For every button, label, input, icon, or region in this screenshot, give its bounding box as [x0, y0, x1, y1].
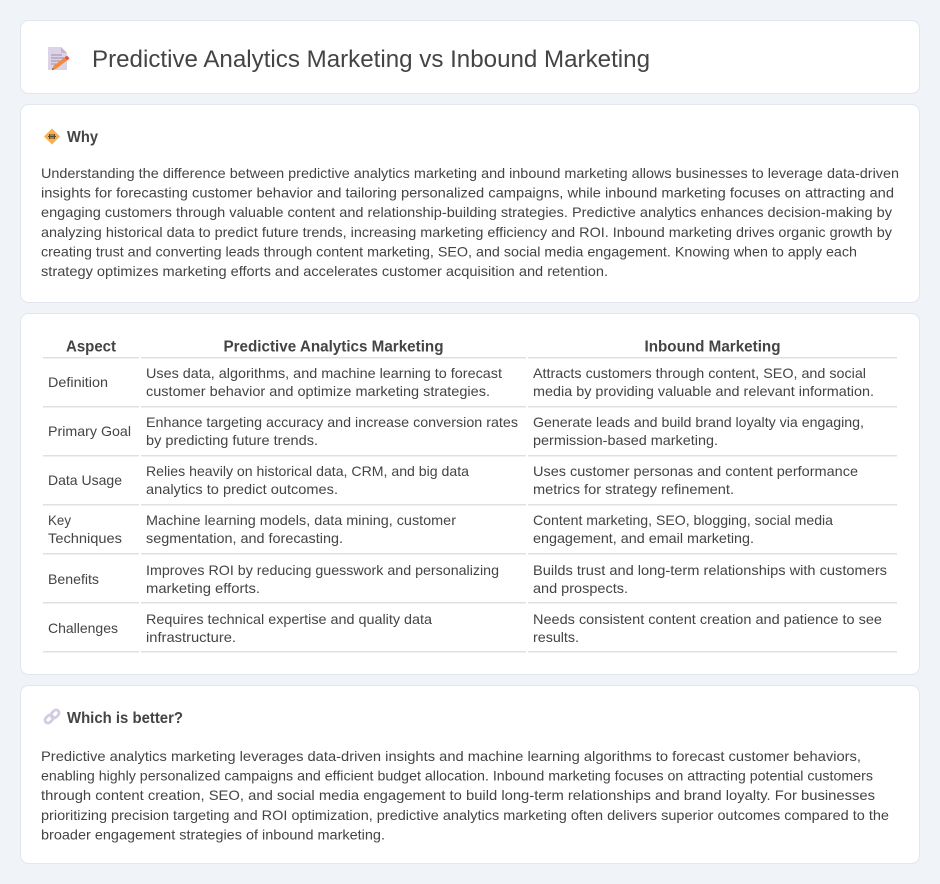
row: data usage: Relies heavily on historical data, CRM, and big data — [146, 463, 469, 479]
heading: which is better: Which is better? — [67, 710, 183, 727]
row: challenges: Challenges — [48, 620, 118, 636]
row: definition: Uses data, algorithms, and machine learning to forecast — [146, 365, 502, 381]
row: benefits: and prospects. — [533, 580, 628, 596]
why text block: Understanding the difference between predictive analytics marketing and inbound marketing allows businesses to leverage data-driven — [41, 165, 899, 181]
row: benefits: Improves ROI by reducing guesswork and personalizing — [146, 562, 499, 578]
row: benefits: marketing efforts. — [146, 580, 260, 596]
panel: comparison table — [20, 314, 920, 674]
row: primary goal — [48, 414, 864, 448]
row: key techniques: Key — [48, 512, 71, 528]
which is better text block: prioritizing precision targeting and ROI optimization, predictive analytics marketing often delivers superior outcomes compared to the — [41, 807, 889, 823]
why text block: analyzing historical data to predict future trends, increasing marketing efficiency and ROI. Inbound marketing drives organic growth by — [41, 224, 892, 240]
row: primary goal: Primary Goal — [48, 423, 131, 439]
row: benefits: Benefits — [48, 571, 99, 587]
icon: memo with pencil — [48, 47, 70, 70]
row: key techniques: Content marketing, SEO, blogging, social media — [533, 512, 833, 528]
row: definition: Definition — [48, 374, 108, 390]
row: key techniques: Techniques — [48, 530, 122, 546]
heading: why: Why — [67, 129, 98, 146]
row: definition: Attracts customers through content, SEO, and social — [533, 365, 866, 381]
why text block: strategy optimizes marketing efforts and accelerates customer acquisition and retention. — [41, 263, 608, 279]
why text block: insights for forecasting customer behavior and tailoring personalized campaigns, while inbound marketing focuses on attracting and — [41, 185, 894, 201]
row: challenges — [48, 611, 882, 645]
panel: which is better — [20, 686, 920, 864]
icon: orange diamond — [44, 128, 60, 144]
row: benefits — [48, 562, 887, 596]
why text block — [41, 165, 899, 279]
row: benefits: Builds trust and long-term relationships with customers — [533, 562, 887, 578]
row: challenges: Needs consistent content creation and patience to see — [533, 611, 882, 627]
row: key techniques: Machine learning models, data mining, customer — [146, 512, 456, 528]
panel: why — [20, 104, 920, 302]
which is better text block: broader engagement strategies of inbound marketing. — [41, 826, 385, 842]
which is better text block: through content creation, SEO, and social media engagement to build long-term relationships and brand loyalty. For businesses — [41, 787, 875, 803]
row: primary goal: by predicting future trends. — [146, 432, 318, 448]
table header: Aspect — [66, 338, 117, 356]
table header: Inbound Marketing — [644, 338, 780, 356]
row: data usage: metrics for strategy refinement. — [533, 481, 734, 497]
why text block: creating trust and converting leads through content marketing, SEO, and social media engagement. Knowing when to apply each — [41, 243, 857, 259]
title: Predictive Analytics Marketing vs Inbound Marketing — [92, 46, 650, 73]
row: key techniques: engagement, and email marketing. — [533, 530, 754, 546]
row: definition: media by providing valuable and relevant information. — [533, 383, 874, 399]
row: challenges: infrastructure. — [146, 629, 236, 645]
row: data usage: Data Usage — [48, 472, 122, 488]
row: data usage: Uses customer personas and content performance — [533, 463, 858, 479]
row: primary goal: Enhance targeting accuracy and increase conversion rates — [146, 414, 518, 430]
row: primary goal: Generate leads and build brand loyalty via engaging, — [533, 414, 864, 430]
which is better text block: Predictive analytics marketing leverages data-driven insights and machine learning algorithms to forecast customer behaviors, — [41, 748, 861, 764]
icon: link — [44, 709, 60, 724]
row: key techniques — [48, 512, 833, 546]
why text block: engaging customers through valuable content and relationship-building strategies. Predictive analytics enhances decision-making by — [41, 204, 892, 220]
row: key techniques: segmentation, and forecasting. — [146, 530, 343, 546]
which is better text block — [41, 748, 889, 842]
row: data usage: analytics to predict outcomes. — [146, 481, 338, 497]
table header — [66, 338, 780, 356]
row: definition — [48, 365, 874, 399]
row: definition: customer behavior and optimize marketing strategies. — [146, 383, 490, 399]
row: challenges: Requires technical expertise and quality data — [146, 611, 432, 627]
panel: title header — [20, 20, 920, 94]
row: data usage — [48, 463, 858, 497]
table header: Predictive Analytics Marketing — [224, 338, 444, 356]
which is better text block: enabling highly personalized campaigns and efficient budget allocation. Inbound marketing focuses on attracting potential customers — [41, 768, 873, 784]
row: primary goal: permission-based marketing. — [533, 432, 718, 448]
row: challenges: results. — [533, 629, 579, 645]
